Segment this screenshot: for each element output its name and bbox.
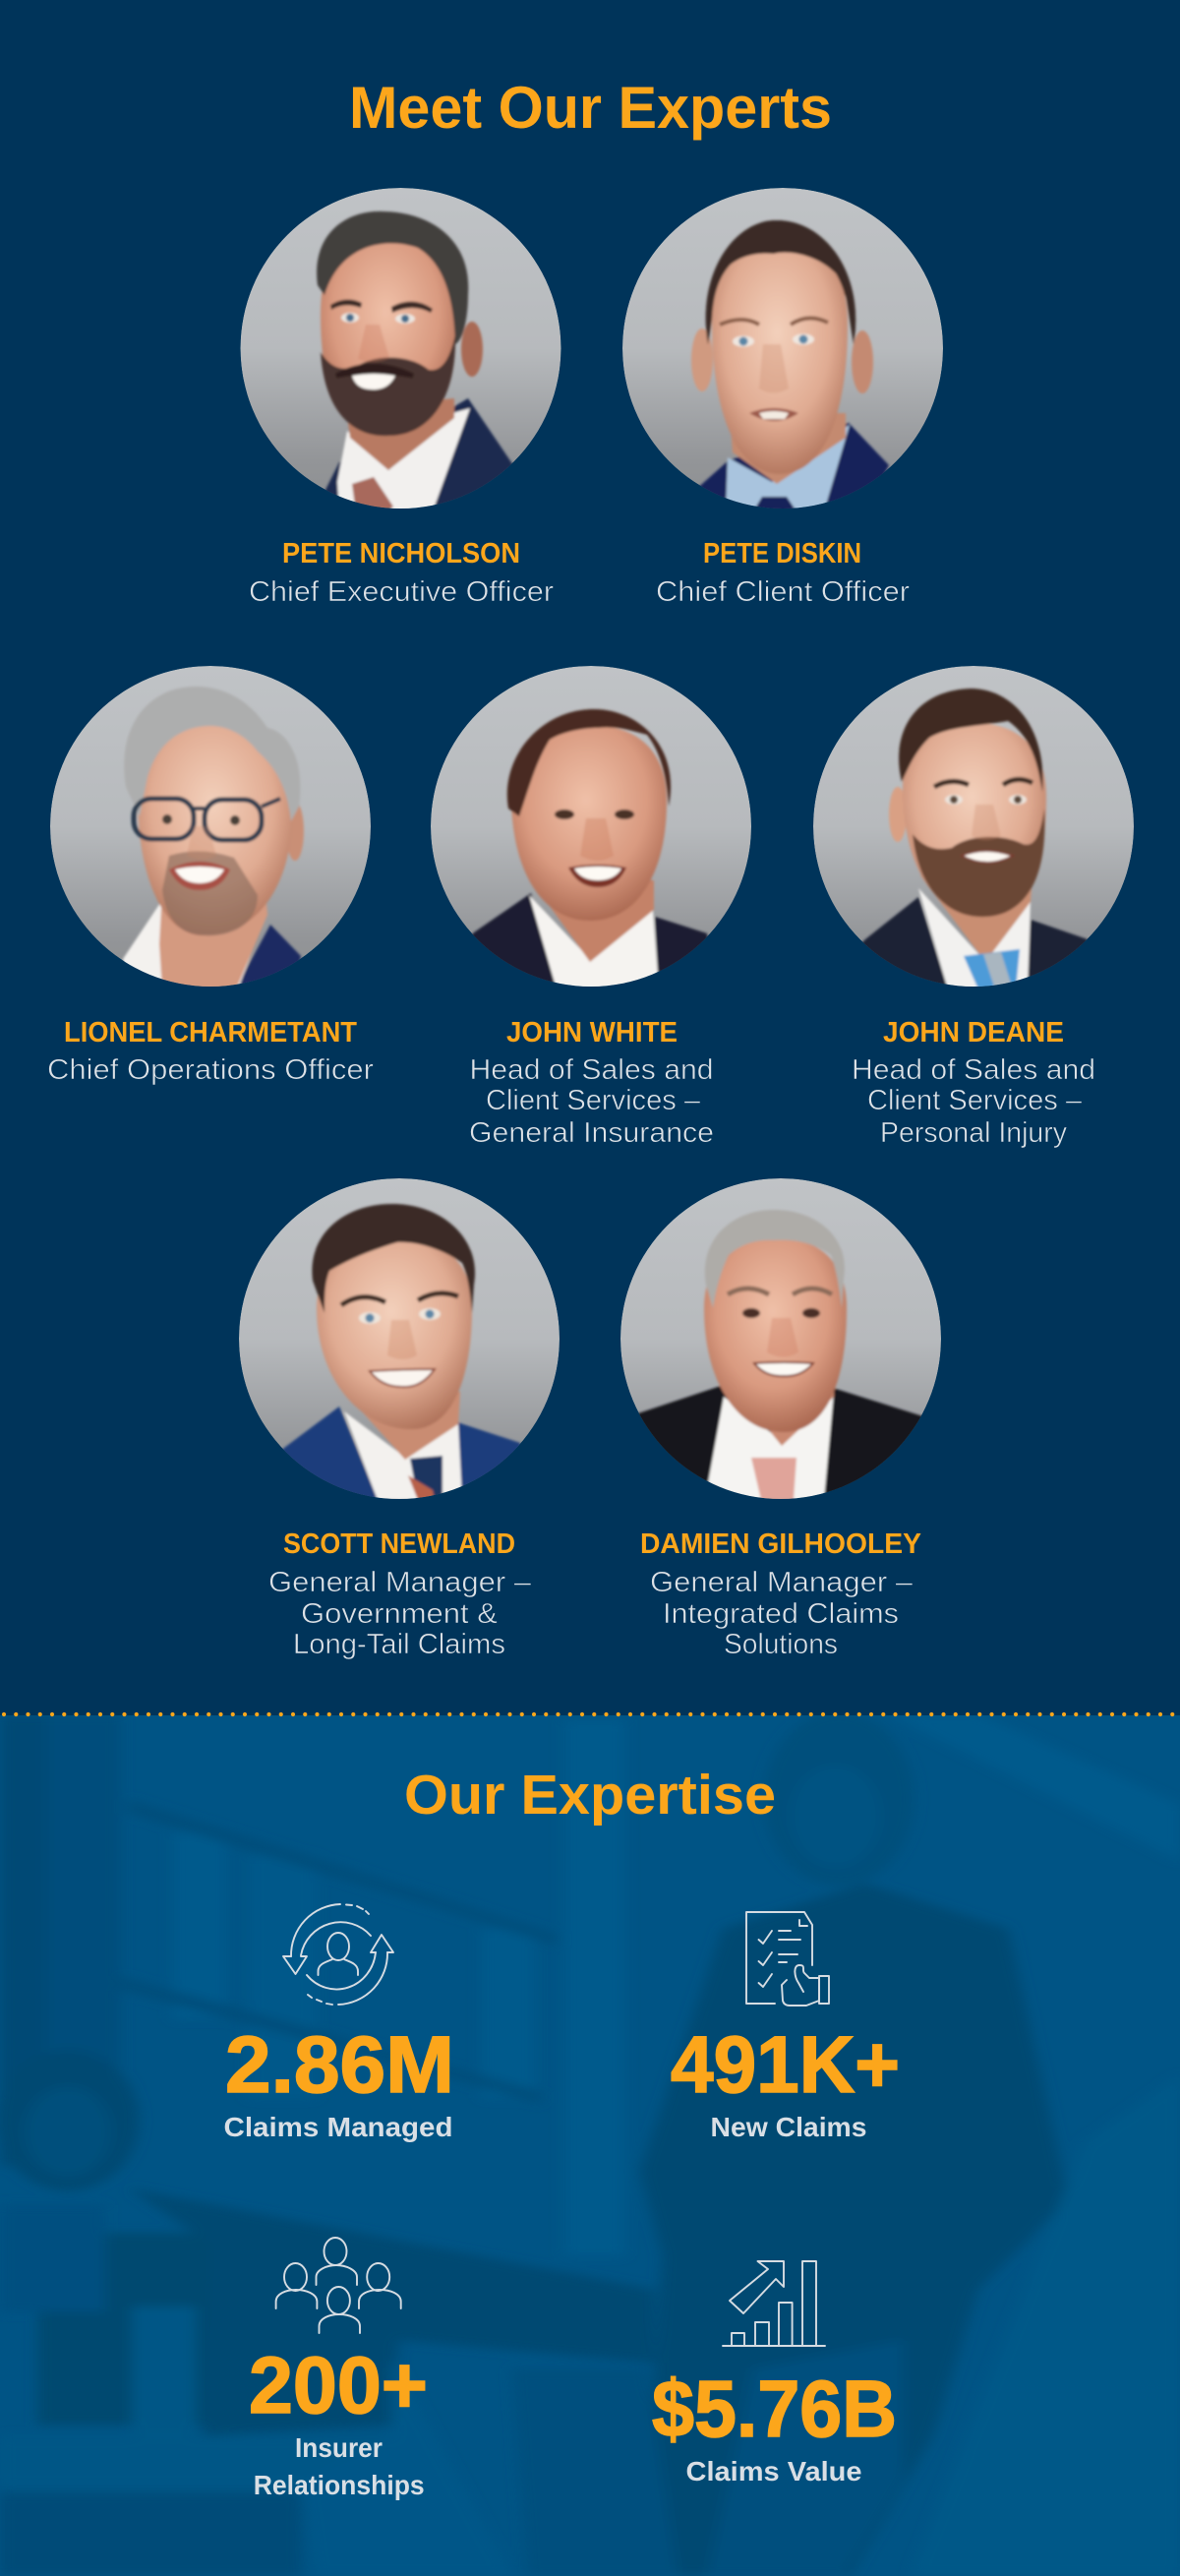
profile: Lionel Charmetant (47, 666, 374, 1086)
role: Head of Sales and (852, 1054, 1095, 1086)
role line 3: Long-Tail Claims (293, 1629, 505, 1660)
name: PETE DISKIN (703, 538, 861, 569)
name: PETE NICHOLSON (282, 538, 520, 569)
role line 3: Solutions (724, 1629, 838, 1660)
value: 2.86M (225, 2020, 454, 2110)
value: 200+ (249, 2341, 428, 2430)
role line 3: General Insurance (469, 1117, 714, 1149)
role: Chief Client Officer (656, 576, 910, 608)
stat: Claims Value (652, 2261, 897, 2486)
name: LIONEL CHARMETANT (64, 1017, 357, 1048)
label: New Claims (710, 2112, 867, 2142)
portrait: Damien Gilhooley (620, 1178, 941, 1500)
label: Claims Value (686, 2456, 861, 2486)
stat: Insurer Relationships (249, 2238, 428, 2500)
stat: New Claims (671, 1912, 900, 2142)
profile: Damien Gilhooley (620, 1178, 941, 1660)
name: SCOTT NEWLAND (283, 1528, 515, 1560)
name: JOHN DEANE (883, 1017, 1064, 1048)
portrait: John White (431, 666, 751, 989)
label line 1: Insurer (295, 2432, 383, 2463)
role: General Manager – (268, 1567, 532, 1598)
portrait: Pete Nicholson (240, 188, 560, 513)
title: Meet Our Experts: Meet Our Experts (349, 75, 832, 141)
label line 2: Relationships (254, 2470, 425, 2500)
icon: growth bars with arrow (723, 2261, 825, 2346)
profile: Pete Nicholson (240, 188, 560, 608)
role: General Manager – (650, 1567, 914, 1598)
profile: John Deane (813, 666, 1134, 1149)
panel: expertise photo background (0, 1711, 1180, 2576)
role: Chief Executive Officer (249, 576, 554, 608)
role line 2: Government & (301, 1598, 498, 1630)
icon: group of people (276, 2238, 401, 2333)
role line 2: Client Services – (867, 1085, 1083, 1116)
role line 2: Client Services – (486, 1085, 701, 1116)
role line 2: Integrated Claims (663, 1598, 899, 1630)
role: Chief Operations Officer (47, 1054, 374, 1086)
profile: Pete Diskin (622, 188, 943, 608)
role: Head of Sales and (470, 1054, 714, 1086)
portrait: Scott Newland (239, 1178, 560, 1500)
profile: Scott Newland (239, 1178, 560, 1660)
panel: navy background (0, 0, 1180, 1715)
profile: John White (431, 666, 751, 1149)
icon: person in cycle arrows (283, 1904, 393, 2005)
name: DAMIEN GILHOOLEY (640, 1528, 921, 1560)
portrait: Lionel Charmetant (50, 666, 371, 989)
portrait: Pete Diskin (622, 188, 943, 511)
label: Claims Managed (224, 2112, 452, 2142)
name: JOHN WHITE (506, 1017, 678, 1048)
value: 491K+ (671, 2020, 900, 2110)
portrait: John Deane (813, 666, 1134, 989)
heading: Our Expertise: Our Expertise (404, 1764, 776, 1827)
role line 3: Personal Injury (880, 1117, 1067, 1149)
icon: checklist with thumbs up (746, 1912, 829, 2006)
stat: Claims Managed (224, 1904, 454, 2142)
value: $5.76B (652, 2365, 897, 2454)
dotted divider (4, 1712, 1180, 1716)
